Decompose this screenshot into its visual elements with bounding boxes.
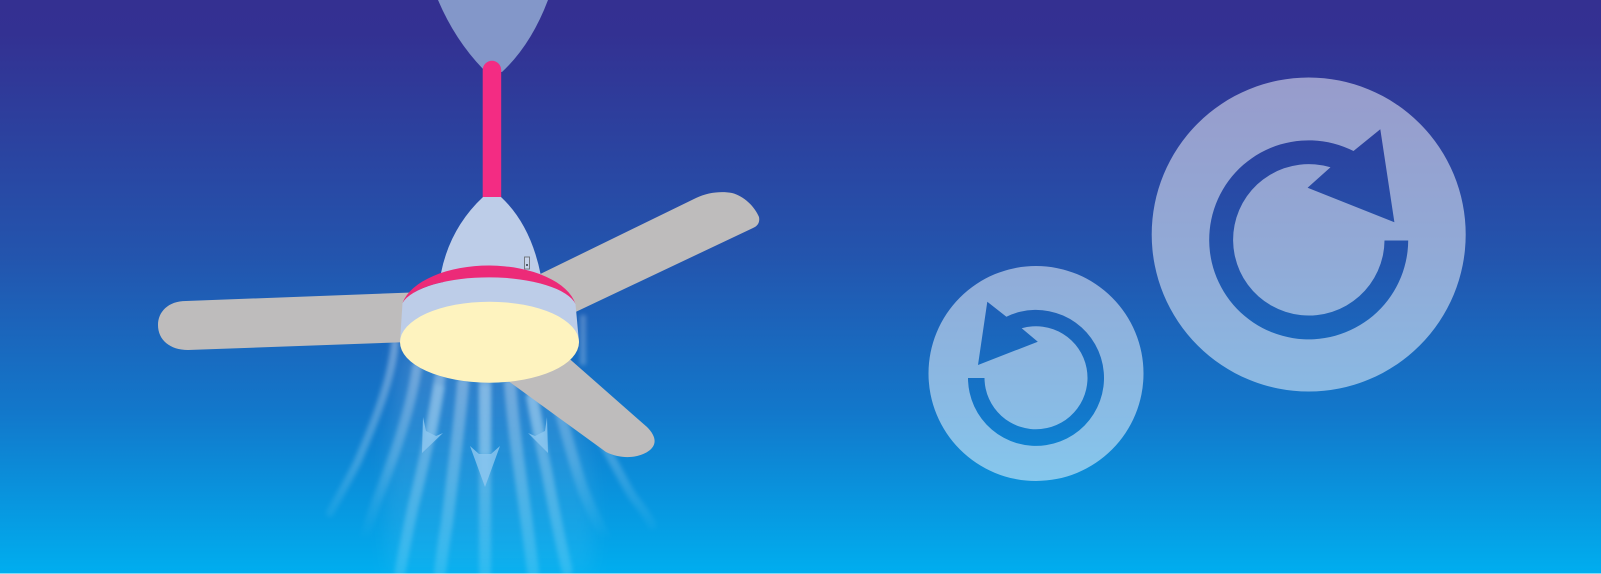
pink band [402,266,576,304]
motor housing [440,197,541,282]
arrow heads [422,417,548,487]
housing drum [400,277,579,342]
fan blade: lower [500,350,655,457]
downrod [483,61,501,197]
ceiling mount canopy [438,0,548,72]
switch detail [524,257,530,269]
side glow [580,315,586,365]
arrows: downward air [422,385,548,487]
rotation icon: clockwise (large) [1152,78,1466,392]
fan blade: left [158,292,425,350]
air flow streaks [330,343,652,574]
rotation icon: counter-clockwise (small) [928,266,1144,481]
arrow shafts [431,385,540,455]
air wash behind streaks [386,350,593,574]
light panel [400,302,579,383]
fan blade: right [530,192,759,317]
